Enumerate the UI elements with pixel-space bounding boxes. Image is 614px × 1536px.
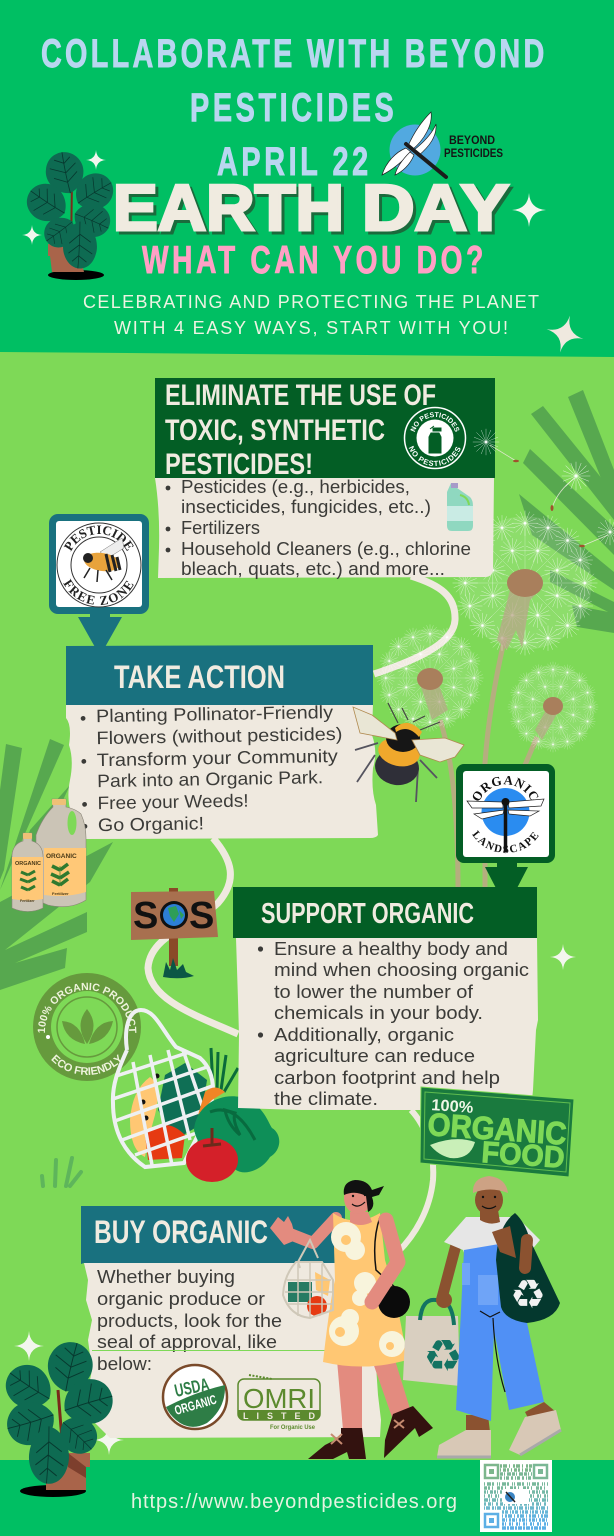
icon: sos sign: S	[133, 895, 158, 937]
icon: eco friendly stamp: ECO FRIENDLY	[51, 1054, 120, 1075]
icon: organic fertilizer bottles	[12, 799, 86, 912]
icon: no pesticides badge	[404, 406, 466, 470]
flowers	[329, 1222, 405, 1357]
tomato	[186, 1138, 238, 1182]
panel 3 bullet list: to lower the number of	[274, 982, 474, 1002]
icon: organic fertilizer bottles: Fertilizer	[52, 891, 69, 896]
neck and head	[480, 1210, 500, 1224]
icon: eco friendly stamp: 100% ORGANIC PRODUCT	[38, 982, 136, 1033]
sign: pesticide free zone: FREE ZONE	[63, 578, 134, 606]
panel 4 text: products, look for the	[97, 1311, 282, 1331]
icon: bee	[353, 703, 464, 802]
dress	[323, 1213, 407, 1367]
arm	[372, 1220, 398, 1302]
panel 2 bullet list	[80, 702, 344, 835]
dandelions	[376, 511, 598, 890]
panel 1 heading text: TOXIC, SYNTHETIC	[165, 414, 385, 447]
shirt	[444, 1217, 540, 1270]
icon: sos sign: S	[189, 895, 214, 937]
left arm	[442, 1245, 456, 1298]
sign: organic landscape	[456, 764, 555, 863]
arrow: green down	[485, 862, 528, 892]
icon: sos sign	[131, 888, 218, 978]
sign: organic landscape: ORGANIC	[472, 776, 538, 801]
panel 1 heading text: PESTICIDES!	[165, 448, 313, 481]
icon: no pesticides badge: NO PESTICIDES	[408, 446, 460, 466]
panel 3 bullet list: carbon footprint and help	[274, 1068, 500, 1088]
legs	[337, 1360, 411, 1430]
panel: support organic	[233, 887, 538, 1110]
panel 1 bullet list	[166, 477, 471, 579]
tagline: CELEBRATING AND PROTECTING THE PLANET	[83, 292, 539, 312]
header band	[0, 0, 614, 357]
tagline	[83, 292, 539, 338]
panel 3 bullet list: mind when choosing organic	[274, 960, 529, 980]
carrot greens	[211, 1048, 238, 1092]
overalls	[456, 1222, 544, 1421]
heading: earth day: EARTH	[113, 171, 344, 244]
bag	[496, 1213, 560, 1323]
carrot	[198, 1088, 225, 1115]
icon: potted plant bottom	[0, 1339, 119, 1497]
icon: organic fertilizer bottles: ORGANIC	[46, 853, 77, 860]
panel 4 text: below:	[97, 1354, 152, 1374]
panel 3 bullet list: agriculture can reduce	[274, 1046, 475, 1066]
palm fronds left	[0, 739, 113, 990]
heading: earth day	[113, 171, 512, 247]
icon: usda organic seal: USDA	[173, 1374, 211, 1401]
illustration: man with bags	[403, 1176, 561, 1457]
panel 2 bullet list: Flowers (without pesticides)	[96, 724, 343, 748]
icon: omri listed seal	[238, 1375, 320, 1431]
panel: eliminate	[155, 378, 495, 579]
icon: 100% organic food sign: 100%	[431, 1097, 474, 1117]
illustration: woman with bag	[270, 1180, 433, 1459]
icon: bleach bottle	[447, 483, 473, 531]
icon: omri listed seal: OMRI	[243, 1383, 315, 1414]
icon: omri listed seal: LISTED	[243, 1411, 316, 1421]
heading: earth day: EARTH	[116, 174, 347, 247]
panel 1 bullet list: Fertilizers	[181, 518, 260, 538]
panel 3 bullet list: Additionally, organic	[274, 1025, 454, 1045]
tagline: WITH 4 EASY WAYS, START WITH YOU!	[114, 318, 508, 338]
panel 1 bullet list: Household Cleaners (e.g., chlorine	[181, 539, 471, 559]
icon: usda organic seal	[163, 1365, 227, 1429]
icon: organic fertilizer bottles: ORGANIC	[15, 861, 41, 867]
panel 4 body	[84, 1263, 381, 1438]
panel 1 bullet list: Pesticides (e.g., herbicides,	[181, 477, 410, 497]
panel 2 bullet list: Go Organic!	[98, 813, 204, 835]
panel 4 heading text: BUY ORGANIC	[94, 1214, 268, 1250]
title: collaborate with beyond pesticides, april 22: PESTICIDES	[190, 85, 394, 130]
panel 1 heading text: ELIMINATE THE USE OF	[165, 379, 436, 412]
shoes	[437, 1430, 491, 1457]
panel 2 bullet list: Planting Pollinator-Friendly	[96, 702, 333, 726]
icon: no pesticides badge: NO PESTICIDES	[410, 412, 460, 432]
logo: beyond pesticides: BEYOND	[449, 135, 495, 147]
boots	[308, 1406, 433, 1459]
icon: 100% organic food sign: ORGANIC	[427, 1106, 568, 1152]
icon: grass tuft	[42, 1158, 81, 1186]
waving arm	[290, 1218, 336, 1243]
lower legs	[466, 1402, 556, 1432]
panel: take action	[66, 645, 378, 839]
panel 2 bullet list: Transform your Community	[97, 746, 338, 770]
panel 1 body	[155, 478, 494, 578]
panel 2 header	[66, 645, 373, 705]
icon: 100% organic food sign: FOOD	[481, 1136, 566, 1175]
panel 4 text	[97, 1267, 282, 1374]
winding path ribbons	[148, 576, 455, 1252]
panel 3 bullet list: Ensure a healthy body and	[274, 939, 508, 959]
title: collaborate with beyond pesticides, april 22: COLLABORATE WITH BEYOND	[41, 31, 544, 76]
panel 2 body	[66, 703, 378, 839]
tote	[403, 1300, 463, 1386]
icon: organic fertilizer bottles: Fertilizer	[20, 899, 35, 903]
panel 3 heading text: SUPPORT ORGANIC	[261, 898, 474, 930]
title: collaborate with beyond pesticides, april 22	[41, 31, 544, 184]
panel 1 heading text	[165, 379, 436, 481]
bag contents	[130, 1063, 207, 1160]
footer url: https://www.beyondpesticides.org	[131, 1491, 457, 1513]
panel 2 bullet list: Park into an Organic Park.	[97, 767, 323, 791]
subheading: what can you do: WHAT CAN YOU DO?	[142, 239, 483, 282]
icon: eco friendly stamp	[33, 973, 141, 1081]
icon: usda organic seal: ORGANIC	[173, 1391, 219, 1418]
panel 4 text: organic produce or	[97, 1289, 265, 1309]
panel 1 header	[155, 378, 495, 478]
panel 4 header	[81, 1206, 345, 1264]
tote: ♻	[423, 1331, 463, 1382]
strap and purse	[375, 1217, 398, 1290]
icon: potted plant top	[20, 148, 120, 280]
sparkles	[14, 150, 588, 1455]
sign: organic landscape: LANDSCAPE	[472, 830, 539, 854]
sign: pesticide free zone	[49, 514, 149, 614]
bag: ♻	[510, 1272, 546, 1318]
qr code	[480, 1460, 552, 1532]
bag mesh	[110, 1010, 215, 1167]
panel 4 text: seal of approval, like	[97, 1332, 277, 1352]
panel 1 bullet list: bleach, quats, etc.) and more...	[181, 559, 445, 579]
panel: buy organic	[81, 1206, 381, 1438]
title: collaborate with beyond pesticides, april 22: APRIL 22	[217, 139, 368, 184]
arm and hand	[525, 1240, 527, 1268]
panel 3 bullet list: the climate.	[274, 1089, 378, 1109]
logo: beyond pesticides: PESTICIDES	[444, 148, 503, 160]
footer band	[0, 1460, 614, 1536]
panel 3 body	[236, 938, 538, 1110]
panel 1 bullet list: insecticides, fungicides, etc..)	[181, 497, 431, 517]
panel 4 text: Whether buying	[97, 1267, 235, 1287]
arrow: teal down	[78, 612, 122, 656]
panel 3 header	[233, 887, 537, 938]
icon: omri listed seal: For Organic Use	[270, 1425, 316, 1431]
panel 3 bullet list	[258, 939, 529, 1109]
panel 3 bullet list: chemicals in your body.	[274, 1003, 483, 1023]
icon: produce and mesh bag	[110, 1010, 279, 1182]
logo: beyond pesticides	[382, 112, 503, 177]
sign: pesticide free zone: PESTICIDE	[64, 526, 134, 552]
palm fronds right	[519, 390, 614, 633]
head	[350, 1212, 372, 1225]
icon: 100% organic food sign	[420, 1087, 574, 1177]
panel 2 bullet list: Free your Weeds!	[97, 791, 249, 813]
panel 2 heading text: TAKE ACTION	[114, 659, 285, 695]
mini mesh bag	[283, 1240, 333, 1318]
heading: earth day: DAY	[365, 174, 512, 247]
heading: earth day: DAY	[362, 171, 509, 244]
seed fluff	[473, 429, 614, 547]
cabbage	[194, 1096, 279, 1172]
